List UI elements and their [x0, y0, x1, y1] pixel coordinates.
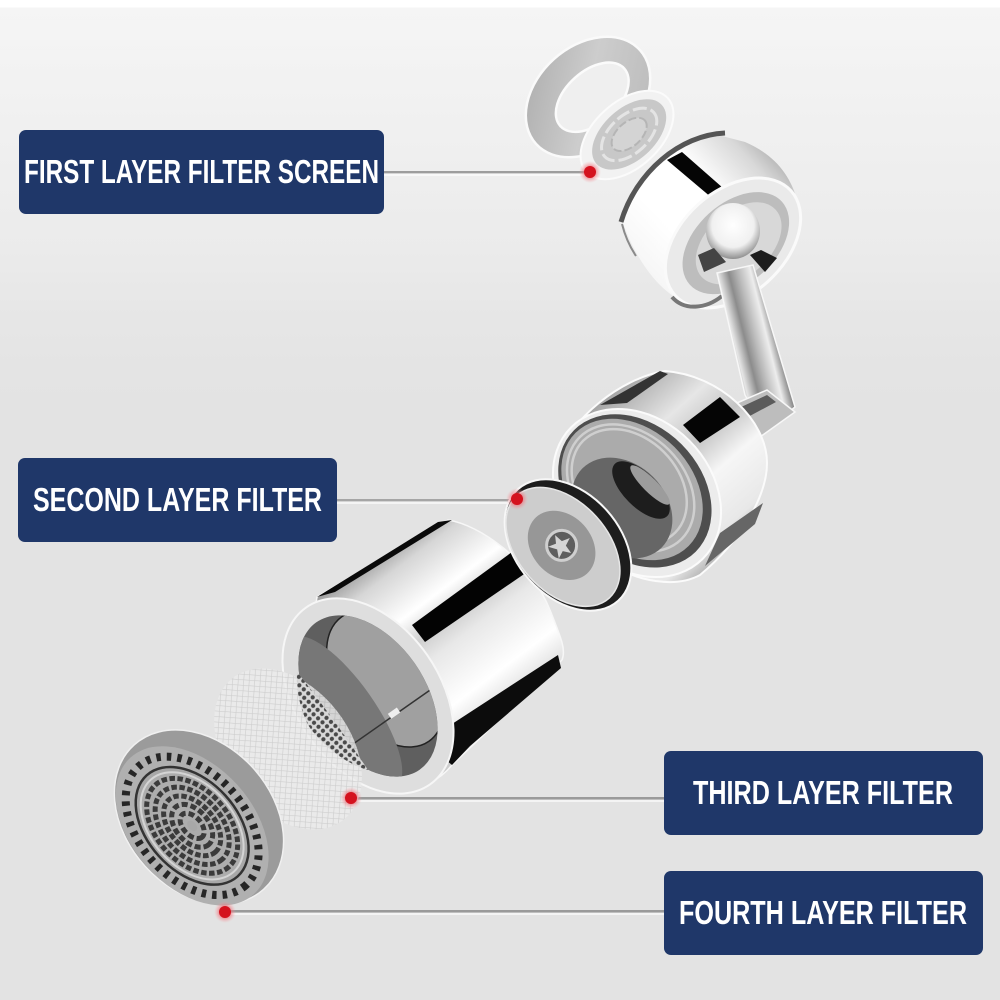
- washer disc: [479, 454, 657, 636]
- threaded opening: [519, 375, 755, 611]
- top chrome swivel body: [621, 133, 826, 334]
- front ring: [640, 152, 826, 334]
- socket notch: [750, 250, 777, 272]
- label: first layer filter screen: FIRST LAYER FILTER SCREEN: [24, 153, 379, 190]
- label: second layer filter: [18, 458, 337, 542]
- red marker: third layer: [340, 787, 362, 809]
- top body shell: [622, 136, 797, 300]
- thread: [621, 133, 725, 222]
- red marker: second layer: [506, 488, 528, 510]
- leader line: second layer: [337, 499, 515, 504]
- black bottom strip: [446, 655, 561, 765]
- red marker: fourth layer: [214, 901, 236, 923]
- body reflections: [600, 371, 668, 405]
- large chrome cylinder: [282, 520, 564, 794]
- black top reflection: [317, 520, 452, 597]
- middle chrome body: [519, 371, 767, 611]
- fourth layer aerator disc: [80, 696, 318, 938]
- outer holes: [99, 731, 285, 921]
- mesh seen against interior: [297, 672, 368, 770]
- front rim: [282, 597, 455, 794]
- label: second layer filter: SECOND LAYER FILTER: [33, 481, 322, 518]
- interior: [270, 590, 466, 802]
- swivel arm: [717, 265, 795, 437]
- leader line: first layer: [384, 171, 588, 176]
- third layer mesh screen: [184, 640, 392, 858]
- swivel ball: [706, 203, 760, 259]
- filter screen disc: [564, 74, 690, 196]
- inner bore: [551, 437, 693, 579]
- black middle strip: [412, 552, 530, 642]
- gasket ring: [502, 12, 674, 182]
- label: third layer filter: [664, 751, 983, 835]
- leader line: fourth layer: [226, 910, 664, 915]
- black reflection strip: [667, 152, 723, 198]
- inner cell rings: [129, 761, 256, 891]
- leader line: third layer: [352, 797, 664, 802]
- label: first layer filter screen: [19, 130, 384, 214]
- red marker: first layer: [579, 161, 601, 183]
- cylinder shell: [300, 520, 564, 790]
- label: fourth layer filter: [664, 871, 983, 955]
- middle body shell: [558, 371, 767, 582]
